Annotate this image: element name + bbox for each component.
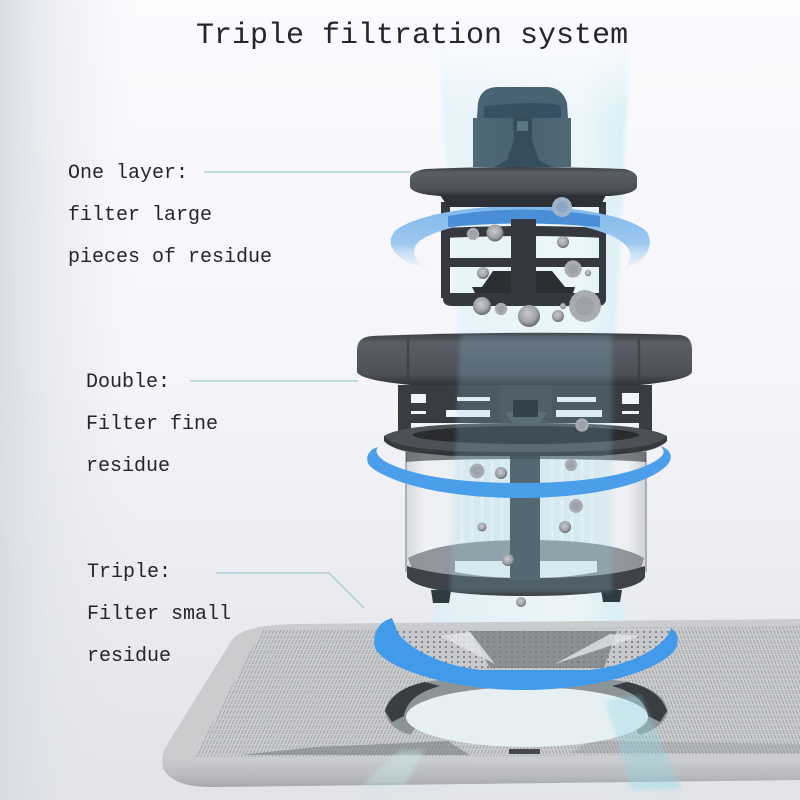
dome handle xyxy=(477,87,568,118)
text block: triple xyxy=(87,561,231,668)
round particles xyxy=(473,224,591,607)
title: Triple filtration system xyxy=(196,19,628,53)
central column xyxy=(510,445,540,580)
blue ring: second layer xyxy=(367,446,671,498)
cup front band xyxy=(407,566,645,596)
leader line: double xyxy=(190,380,358,382)
blue ring: third layer xyxy=(374,618,678,690)
central funnel xyxy=(470,631,617,668)
particles xyxy=(468,199,598,607)
text block: double: residue xyxy=(86,455,170,478)
hole rim xyxy=(385,680,668,735)
beam tint on middle filter xyxy=(450,334,612,592)
glass cup xyxy=(406,445,646,573)
leader line: triple xyxy=(216,573,364,608)
plate perforations left xyxy=(194,628,530,757)
panel: top filter xyxy=(391,87,650,306)
lower disc xyxy=(384,423,667,456)
panel: bottom perforated plate xyxy=(162,618,800,790)
text block: double: Filter fine xyxy=(86,413,218,436)
text block: triple: Triple: xyxy=(87,561,171,584)
text block: one layer xyxy=(68,162,272,269)
plate perforations right xyxy=(530,626,800,756)
top ring xyxy=(357,333,692,385)
bottom shade near hole xyxy=(240,741,470,755)
dotted area behind ring xyxy=(380,628,675,668)
cage bars xyxy=(441,200,606,306)
cup bottom ring xyxy=(408,540,644,582)
feet xyxy=(431,590,451,603)
text block: one layer: pieces of residue xyxy=(68,246,272,269)
beam over plate xyxy=(605,695,682,790)
blue ring: first layer xyxy=(391,206,650,268)
leader line: one layer xyxy=(204,171,411,173)
text block: triple: residue xyxy=(87,645,171,668)
panel: middle filter xyxy=(357,333,692,603)
plate front lip xyxy=(163,757,800,787)
hole opening xyxy=(406,687,648,747)
top disc xyxy=(410,167,637,196)
text block: one layer: filter large xyxy=(68,204,212,227)
text block: double: Double: xyxy=(86,371,170,394)
text block: triple: Filter small xyxy=(87,603,231,626)
light beam xyxy=(432,58,628,622)
text block: one layer: One layer: xyxy=(68,162,188,185)
plate body xyxy=(162,619,800,787)
upper cage xyxy=(398,385,652,440)
slot xyxy=(509,749,540,754)
virus particles xyxy=(468,199,598,512)
text block: double xyxy=(86,371,218,478)
